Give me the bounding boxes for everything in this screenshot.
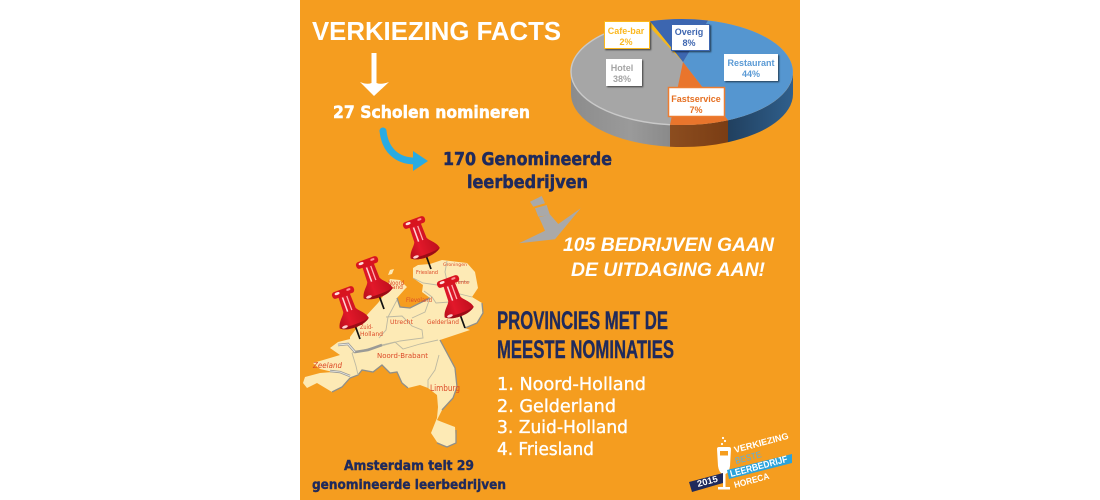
title: VERKIEZING FACTS	[312, 16, 561, 46]
map province labels: Zuid-	[360, 323, 373, 331]
list: top provinces: 4. Friesland	[497, 440, 594, 460]
text: 105 bedrijven gaan de uitdaging aan: DE UITDAGING AAN!	[571, 260, 765, 281]
label: Overig: Overig	[675, 27, 703, 37]
map province labels: Gelderland	[427, 318, 459, 326]
text: Amsterdam telt 29 genomineerde leerbedrijven	[312, 458, 506, 493]
ribbon: 2015: 2015	[696, 474, 719, 489]
arrow: grey chevron arrow	[519, 196, 581, 243]
heading: provincies met de meeste nominaties: MEESTE NOMINATIES	[497, 336, 674, 364]
map island Texel	[388, 269, 394, 275]
label: Restaurant: 44%	[742, 69, 760, 79]
arrow: white down arrow	[360, 53, 389, 96]
text: Horeca: HORECA	[733, 471, 771, 490]
pie top slices	[571, 19, 793, 125]
icon: red pin Noord-Holland	[351, 254, 399, 314]
ribbon: Leerbedrijf: LEERBEDRIJF	[729, 454, 789, 480]
arrow: blue curved arrow	[383, 131, 428, 171]
label: Fastservice	[668, 88, 724, 116]
text: 170 Genomineerde leerbedrijven: leerbedrijven	[467, 172, 588, 193]
icon: glass	[717, 437, 731, 490]
label: Cafe-bar: Cafe-bar	[608, 26, 645, 36]
map shaded coast	[332, 298, 483, 447]
map province borders	[352, 261, 472, 388]
heading: provincies met de meeste nominaties	[497, 307, 674, 364]
text: 105 bedrijven gaan de uitdaging aan	[563, 235, 775, 281]
label: Overig: 8%	[682, 38, 696, 48]
orange panel background	[300, 0, 800, 500]
map province labels: Limburg	[430, 384, 460, 394]
map province labels: Noord	[388, 279, 404, 287]
label: Cafe-bar: 2%	[619, 37, 633, 47]
text: 170 Genomineerde leerbedrijven: 170 Genomineerde	[443, 149, 612, 170]
list: top provinces: 3. Zuid-Holland	[497, 418, 628, 438]
map province labels: Flevoland	[406, 296, 432, 304]
label: Fastservice: Fastservice	[671, 94, 721, 104]
map province labels: Noord-Brabant	[377, 352, 428, 360]
text: Beste: BESTE	[734, 449, 763, 466]
icon: red pin Zuid-Holland	[327, 284, 375, 344]
map province labels: Friesland	[416, 270, 438, 276]
map province labels: land	[390, 283, 403, 291]
text: 170 Genomineerde leerbedrijven	[443, 149, 612, 193]
label: Fastservice: 7%	[689, 105, 703, 115]
pie side	[571, 72, 793, 147]
pie chart: sector distribution	[571, 19, 793, 147]
map of the Netherlands	[303, 260, 483, 447]
text: Amsterdam telt 29 genomineerde leerbedrijven: genomineerde leerbedrijven	[312, 477, 506, 493]
heading: provincies met de meeste nominaties: PROVINCIES MET DE	[497, 307, 668, 335]
label: Hotel: 38%	[613, 74, 631, 84]
label: Overig	[672, 24, 710, 50]
logo: Verkiezing Beste Leerbedrijf Horeca 2015	[689, 431, 792, 492]
label: Restaurant: Restaurant	[727, 58, 775, 68]
icon: red pin Gelderland	[432, 273, 480, 333]
map province labels: Zeeland	[312, 361, 342, 370]
map province labels	[312, 262, 469, 394]
list: top provinces: 2. Gelderland	[497, 397, 616, 417]
label: Cafe-bar	[604, 22, 650, 48]
text: Amsterdam telt 29 genomineerde leerbedrijven: Amsterdam telt 29	[344, 458, 474, 474]
text: Verkiezing: VERKIEZING	[733, 431, 790, 455]
map land shape	[303, 260, 483, 447]
list: top provinces	[497, 375, 646, 460]
label: Restaurant	[724, 54, 778, 81]
text: 27 Scholen nomineren: 27 Scholen nomineren	[333, 103, 530, 123]
map province labels: Drente	[452, 280, 469, 286]
map province labels: Groningen	[443, 262, 467, 268]
map waterways	[330, 344, 382, 376]
icon: red pin Friesland	[398, 214, 446, 274]
map province labels: Holland	[360, 330, 383, 338]
label: Hotel: Hotel	[611, 63, 633, 73]
label: Hotel	[606, 59, 642, 86]
list: top provinces: 1. Noord-Holland	[497, 375, 646, 395]
map province labels: Utrecht	[390, 318, 413, 326]
text: 105 bedrijven gaan de uitdaging aan: 105 BEDRIJVEN GAAN	[563, 235, 775, 256]
